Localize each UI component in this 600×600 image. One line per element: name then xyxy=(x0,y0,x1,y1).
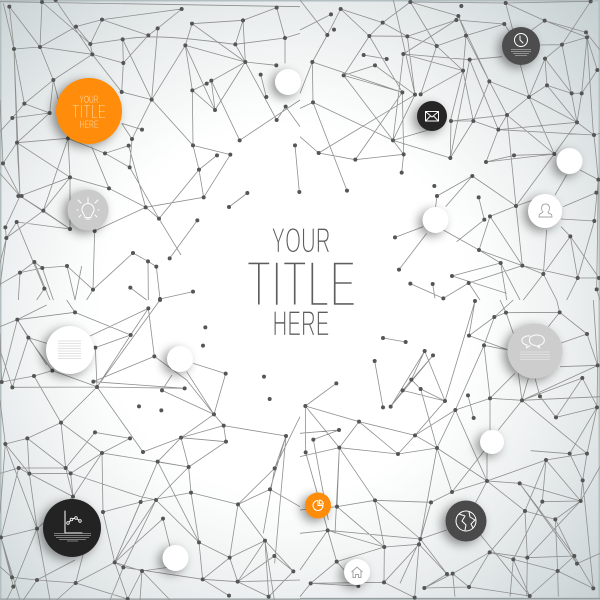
icon: pie xyxy=(313,500,324,510)
circle: dark globe xyxy=(446,500,486,542)
circle: blank white lower right xyxy=(480,430,504,454)
circle: blank white right xyxy=(556,148,582,174)
icon: clock xyxy=(514,34,528,46)
text lines xyxy=(58,341,81,358)
badge text: HERE xyxy=(80,119,98,131)
icon: home xyxy=(352,567,362,578)
circle: blank white centre right xyxy=(422,207,448,233)
circle: blank white bottom xyxy=(162,545,188,571)
title: YOUR xyxy=(272,222,330,260)
circle: black chart xyxy=(43,499,101,557)
circle: orange title badge xyxy=(56,78,122,144)
circle: grey speech xyxy=(508,324,562,378)
circle: white text block xyxy=(46,326,94,374)
circle: white home xyxy=(344,559,370,585)
title xyxy=(246,222,356,344)
icon: light bulb xyxy=(77,198,99,219)
circle: orange chart xyxy=(305,492,331,518)
title: TITLE xyxy=(246,246,356,320)
mesh: bottom right xyxy=(300,300,600,598)
badge text xyxy=(72,94,106,131)
text lines xyxy=(511,50,531,56)
badge text: TITLE xyxy=(72,102,106,123)
circle: blank white left xyxy=(167,346,193,372)
circle: blank white top xyxy=(275,69,301,95)
badge text: YOUR xyxy=(80,94,99,106)
icon: user xyxy=(539,204,552,217)
text lines xyxy=(54,534,91,541)
icon: globe xyxy=(456,511,476,531)
icon: speech bubbles xyxy=(522,335,544,348)
mesh: top right xyxy=(300,0,600,300)
title: HERE xyxy=(272,304,330,344)
mesh: bottom left xyxy=(0,300,300,600)
chart dots xyxy=(67,517,81,524)
circle: dark clock xyxy=(502,27,540,65)
icon: envelope xyxy=(426,112,438,121)
circle: black envelope xyxy=(417,101,447,131)
mesh: top left xyxy=(0,0,300,300)
circle: white user xyxy=(528,194,562,228)
icon: line chart xyxy=(65,511,82,533)
text lines xyxy=(520,352,550,360)
circle: light bulb xyxy=(68,190,108,230)
